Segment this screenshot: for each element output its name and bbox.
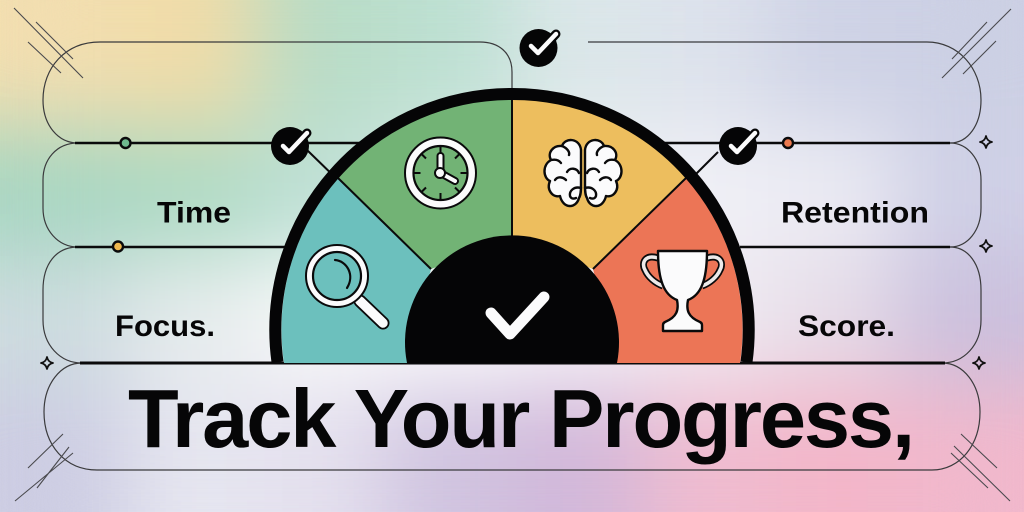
node dots [113,138,793,252]
icon: brain [544,140,622,206]
label: Retention: Retention [781,196,929,230]
check badge: left [271,127,309,165]
gauge [275,94,749,363]
segment dividers [338,95,686,269]
sparkles [41,136,992,369]
horizontal connector lines [75,143,950,363]
hub check [491,297,544,334]
brain left hemisphere [544,140,581,206]
label: Focus.: Focus. [115,310,215,343]
brain right hemisphere [585,140,622,206]
title: Track Your Progress, [128,372,915,465]
pill outlines [43,42,981,470]
segment: retention [512,99,686,269]
icon: trophy [644,251,721,331]
check badge: top [520,29,558,67]
icon: magnifier [306,245,383,323]
check badge: right [719,127,757,165]
segment: time [338,99,512,269]
label: Time: Time [157,196,231,230]
label: Score.: Score. [798,310,895,343]
gauge rim [275,94,749,362]
segment: focus [282,178,431,363]
icon: clock [405,138,476,208]
center hub [405,235,619,363]
segment: score [593,178,742,363]
